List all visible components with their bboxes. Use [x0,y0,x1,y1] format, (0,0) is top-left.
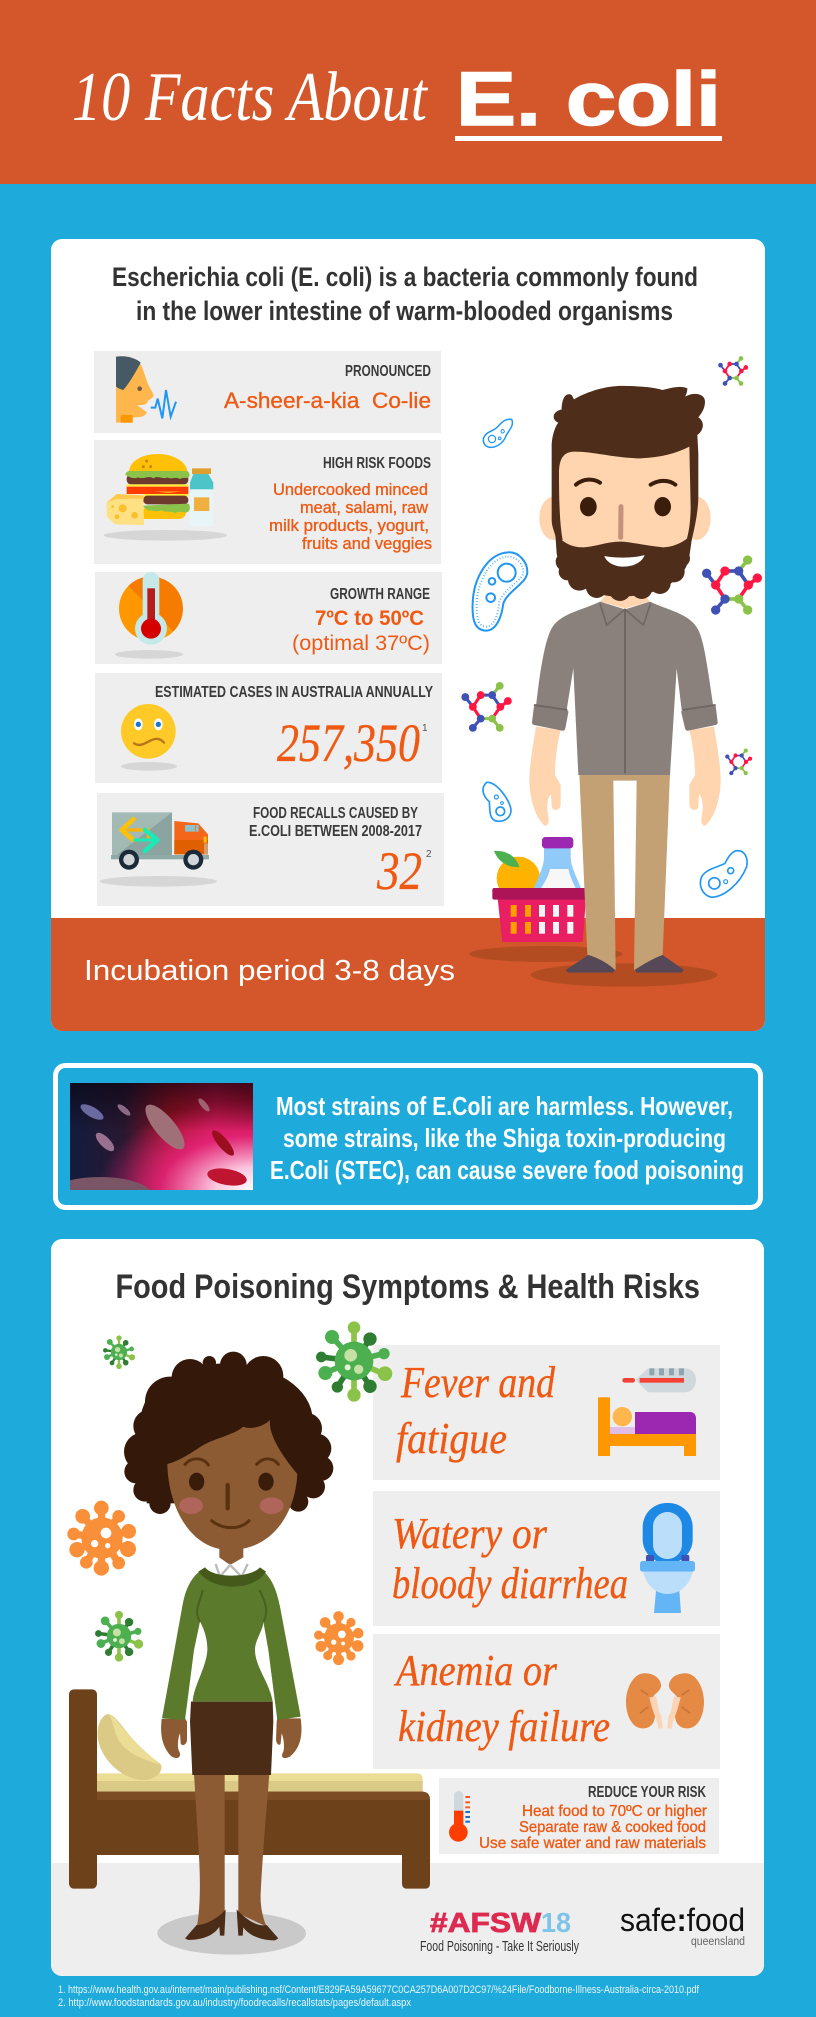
row: high risk foods: HIGH RISK FOODS [323,455,431,472]
text: high risk food list: fruits and veggies [302,534,432,553]
symptom: fever and fatigue: fatigue [396,1414,507,1463]
box: reduce your risk: Separate raw & cooked food [519,1819,706,1836]
row: pronounced: A-sheer-a-kia Co-lie [224,388,431,413]
panel: about E. coli [51,239,765,1031]
box: reduce your risk [439,1778,719,1854]
logo: AFSW18 campaign: Food Poisoning - Take It Seriously [420,1938,579,1955]
text: high risk food list: meat, salami, raw [300,498,429,517]
box: reduce your risk: REDUCE YOUR RISK [588,1784,707,1801]
icon: delivery truck [100,812,217,887]
symptom: anemia or kidney failure: Anemia or [393,1646,558,1695]
row: growth range: 7ºC to 50ºC [315,607,424,630]
icon: thermometer in orange circle [115,572,183,659]
row: estimated cases: 1 [422,723,428,734]
shadows under man and basket [469,946,717,987]
logo: AFSW18 campaign: 18 [541,1907,571,1938]
row: estimated cases: ESTIMATED CASES IN AUSTRALIA ANNUALLY [155,684,434,701]
symptom: anemia or kidney failure: kidney failure [398,1702,610,1751]
symptom: watery or bloody diarrhea: bloody diarrhea [392,1559,628,1608]
callout text: some strains, like the Shiga toxin-producing [283,1123,726,1153]
icon: toilet [640,1503,695,1613]
panel heading: in the lower intestine of warm-blooded organisms [136,296,673,326]
footnotes [58,1984,700,2009]
logo: AFSW18 campaign [420,1907,579,1955]
row: growth range [95,572,442,664]
text: high risk food list [269,480,432,553]
icon: worried face [121,704,177,771]
row: growth range: (optimal 37ºC) [292,632,430,655]
icon: thermometer and sick bed [598,1368,696,1456]
box: reduce your risk: Use safe water and raw materials [479,1835,706,1852]
symptom: watery or bloody diarrhea [373,1491,720,1626]
box: reduce your risk: Heat food to 70ºC or higher [522,1803,708,1820]
icon: bacteria outlines [473,419,747,897]
icon: temperature gauge [449,1791,470,1842]
icon: shopping basket [492,837,588,942]
header banner [0,0,816,184]
row: pronounced [94,351,441,433]
title: 10 Facts About: 10 Facts About [72,59,428,136]
row: estimated cases: 257,350 [277,713,420,773]
icon: viruses [67,1321,392,1665]
illustration: woman [124,1352,333,1955]
illustration: bed [69,1689,430,1889]
text: high risk food list: milk products, yogurt, [269,516,429,535]
logo: safe food queensland: queensland [691,1936,745,1948]
symptom: fever and fatigue [373,1345,720,1480]
row: food recalls: E.COLI BETWEEN 2008-2017 [249,823,422,840]
logo: safe food queensland: safe:food [620,1902,745,1938]
panel: symptoms and health risks [51,1239,764,1976]
row: food recalls [97,793,444,906]
icon: kidneys [626,1673,704,1728]
grey floor [51,1863,764,1976]
logo: AFSW18 campaign: #AFSW [430,1907,542,1938]
row: growth range: GROWTH RANGE [330,586,430,603]
icon: molecules [461,356,762,775]
row: pronounced: PRONOUNCED [345,363,431,380]
text: incubation period: Incubation period 3-8 days [84,955,455,987]
symptom: fever and fatigue: Fever and [400,1358,556,1407]
panel heading: Food Poisoning Symptoms & Health Risks [116,1268,700,1306]
callout: harmless strains [48,1066,760,1213]
row: food recalls: FOOD RECALLS CAUSED BY [253,805,418,822]
illustration: bearded man [529,386,721,973]
text: high risk food list: Undercooked minced [273,480,428,499]
symptom: anemia or kidney failure [373,1634,720,1769]
icon: burger, cheese and milk [104,454,227,541]
row: estimated cases [95,673,442,783]
panel heading: Escherichia coli (E. coli) is a bacteria commonly found [112,262,698,292]
panel heading [112,262,698,326]
symptom: watery or bloody diarrhea: Watery or [392,1509,548,1558]
footnotes: 2. http://www.foodstandards.gov.au/industry/foodrecalls/recallstats/pages/default.aspx [58,1997,411,2009]
row: food recalls: 32 [376,841,422,901]
row: high risk foods [94,440,441,564]
row: food recalls: 2 [426,849,432,860]
photo: bacteria micrograph [70,1083,253,1190]
title: E. coli with underline: E. coli [456,57,721,142]
orange incubation band [51,918,765,1031]
icon: speaking head [116,356,176,423]
callout text [270,1091,744,1185]
